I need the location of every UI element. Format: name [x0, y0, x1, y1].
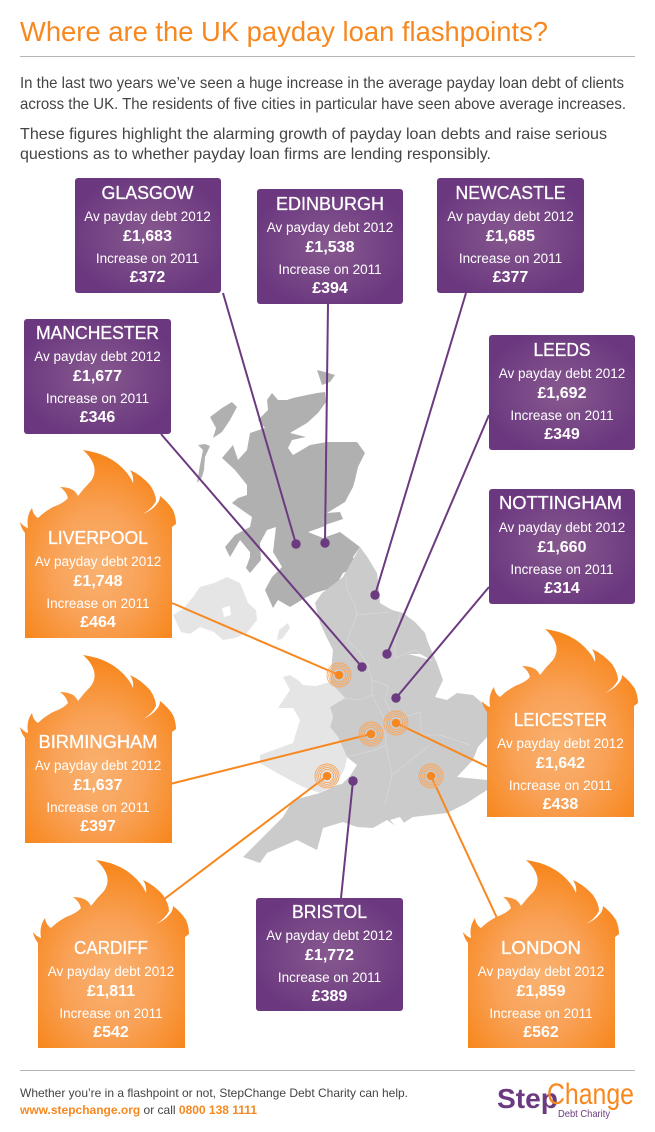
panel: Glasgow [75, 178, 221, 293]
panel: Manchester: Increase on 2011 [46, 391, 149, 406]
footer text: www.stepchange.org or call 0800 138 1111 [19, 1103, 257, 1117]
map: Isle of Man [277, 623, 290, 640]
panel: London flame: Av payday debt 2012 [478, 964, 604, 979]
footer text: Whether you’re in a flashpoint or not, StepChange Debt Charity can help. [20, 1086, 408, 1100]
panel: Leeds: £349 [544, 426, 580, 443]
map: England [243, 547, 495, 863]
panel: Leeds: Increase on 2011 [510, 408, 614, 423]
map marker: Birmingham flashpoint [359, 722, 383, 746]
panel: London flame: £562 [523, 1024, 559, 1041]
panel: Manchester: £346 [80, 409, 115, 426]
panel: Cardiff flame [33, 860, 189, 1048]
connector lines: purple [161, 293, 489, 898]
panel: Liverpool flame: £1,748 [74, 573, 123, 590]
panel: Manchester: Av payday debt 2012 [34, 349, 161, 364]
logo: StepChange Debt Charity: Step [497, 1083, 558, 1114]
panel: Edinburgh [257, 189, 403, 304]
map: Scottish islands [197, 370, 335, 483]
intro text: across the UK. The residents of five cities in particular have seen above average increases. [20, 96, 626, 113]
panel: Bristol: Av payday debt 2012 [266, 928, 393, 943]
panel: Edinburgh: Av payday debt 2012 [267, 220, 393, 235]
panel: London flame: LONDON [501, 937, 581, 958]
panel: Birmingham flame: Increase on 2011 [46, 800, 150, 815]
panel: Bristol: £1,772 [305, 947, 354, 964]
panel: Newcastle: Av payday debt 2012 [447, 209, 574, 224]
panel: Birmingham flame [20, 655, 176, 843]
map marker: London flashpoint [419, 764, 443, 788]
panel: Leicester flame: £438 [543, 796, 578, 813]
logo: StepChange Debt Charity: Change [547, 1078, 634, 1111]
panel: Bristol: £389 [312, 988, 347, 1005]
map: Northern Ireland [173, 577, 257, 640]
panel: Nottingham: £314 [544, 580, 580, 597]
intro text: questions as to whether payday loan firms are lending responsibly. [20, 146, 491, 163]
panel: Bristol: Increase on 2011 [278, 970, 381, 985]
panel: Leeds: LEEDS [534, 339, 590, 360]
panel: Cardiff flame: Increase on 2011 [59, 1006, 163, 1021]
panel: Cardiff flame: CARDIFF [74, 937, 148, 958]
panel: Manchester [24, 319, 171, 434]
map markers: purple dots [291, 538, 401, 786]
panel: Birmingham flame: BIRMINGHAM [38, 731, 158, 752]
footer text [19, 1086, 408, 1117]
panel: Cardiff flame: £542 [93, 1024, 129, 1041]
panel: Bristol: BRISTOL [292, 901, 367, 922]
logo: StepChange Debt Charity [497, 1078, 634, 1120]
map marker: Cardiff flashpoint [315, 764, 339, 788]
panel: Edinburgh: £394 [312, 280, 348, 297]
map marker: Liverpool flashpoint [327, 663, 351, 687]
panel: Liverpool flame: £464 [80, 614, 116, 631]
map of the UK [173, 370, 495, 863]
panel: Glasgow: £1,683 [123, 228, 172, 245]
panel: Birmingham flame: £397 [80, 818, 116, 835]
intro text: In the last two years we’ve seen a huge increase in the average payday loan debt of clients [20, 75, 624, 92]
panel: Leicester flame: Increase on 2011 [509, 778, 612, 793]
panel: Liverpool flame: LIVERPOOL [48, 527, 148, 548]
panel: Leicester flame: LEICESTER [514, 709, 607, 730]
panel: Manchester: MANCHESTER [36, 322, 159, 343]
panel: Glasgow: £372 [130, 269, 165, 286]
panel: Newcastle: £1,685 [486, 228, 535, 245]
panel: Newcastle: Increase on 2011 [459, 251, 562, 266]
panel: Glasgow: Av payday debt 2012 [84, 209, 211, 224]
panel: Liverpool flame: Increase on 2011 [46, 596, 150, 611]
panel: Newcastle: £377 [493, 269, 528, 286]
panel: London flame [463, 860, 619, 1048]
panel: Nottingham: Increase on 2011 [510, 562, 614, 577]
panel: Leeds [489, 335, 635, 450]
panel: Leeds: Av payday debt 2012 [499, 366, 625, 381]
panel: Newcastle: NEWCASTLE [456, 182, 566, 203]
panel: Nottingham: Av payday debt 2012 [499, 520, 625, 535]
panel: Edinburgh: £1,538 [306, 239, 355, 256]
panel: Newcastle [437, 178, 584, 293]
map: Scotland [222, 392, 365, 608]
title: Where are the UK payday loan flashpoints? [20, 16, 548, 47]
panel: Glasgow: Increase on 2011 [96, 251, 199, 266]
panel: Leicester flame [482, 629, 638, 817]
panel: Nottingham: NOTTINGHAM [499, 492, 622, 513]
panel: Glasgow: GLASGOW [102, 182, 194, 203]
panel: Birmingham flame: Av payday debt 2012 [35, 758, 161, 773]
intro text [20, 75, 626, 163]
panel: Nottingham [489, 489, 635, 604]
panel: London flame: Increase on 2011 [489, 1006, 593, 1021]
panel: Cardiff flame: Av payday debt 2012 [48, 964, 174, 979]
panel: Edinburgh: Increase on 2011 [278, 262, 382, 277]
panel: Nottingham: £1,660 [538, 539, 587, 556]
panel: London flame: £1,859 [517, 983, 566, 1000]
logo: StepChange Debt Charity: Debt Charity [558, 1108, 611, 1120]
panel: Edinburgh: EDINBURGH [276, 193, 384, 214]
panel: Liverpool flame [20, 450, 176, 638]
panel: Birmingham flame: £1,637 [74, 777, 123, 794]
panel: Leicester flame: Av payday debt 2012 [497, 736, 624, 751]
panel: Manchester: £1,677 [73, 368, 122, 385]
map: Wales [260, 675, 347, 793]
panel: Bristol [256, 898, 403, 1011]
panel: Leicester flame: £1,642 [536, 755, 585, 772]
connector lines: orange [163, 603, 497, 918]
panel: Liverpool flame: Av payday debt 2012 [35, 554, 161, 569]
panel: Cardiff flame: £1,811 [87, 983, 135, 1000]
panel: Leeds: £1,692 [538, 385, 587, 402]
intro text: These figures highlight the alarming growth of payday loan debts and raise serious [20, 126, 607, 143]
map marker: Leicester flashpoint [384, 711, 408, 735]
